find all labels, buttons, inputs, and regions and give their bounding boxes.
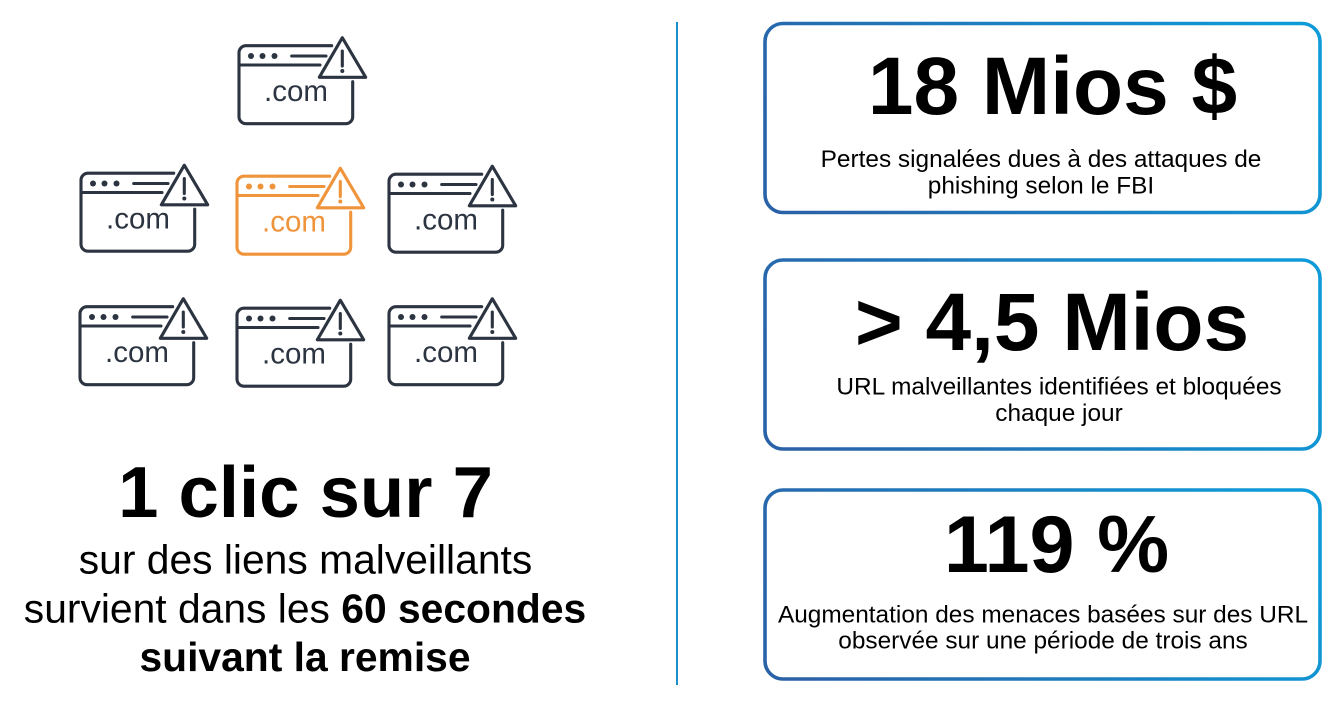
icon: row 2 left website warning (81, 165, 208, 251)
description: malicious URLs: URL malveillantes identifiées et bloquées (836, 374, 1282, 400)
description: phishing losses: phishing selon le FBI (928, 172, 1154, 200)
icon: row 2 centre orange website warning (237, 168, 364, 254)
description: malicious URLs: chaque jour (995, 400, 1123, 427)
icon: row 2 left website warning: .com (106, 202, 170, 236)
description: URL threat growth: observée sur une période de trois ans (838, 628, 1248, 654)
stat: 18 Mios $: 18 Mios $ (868, 41, 1237, 132)
panel: 119 % (765, 490, 1320, 679)
description: URL threat growth: Augmentation des menaces basées sur des URL (778, 602, 1308, 628)
icon: row 3 left website warning: .com (105, 336, 169, 369)
icon: row 3 right website warning (389, 299, 516, 385)
icon: row 3 right website warning: .com (414, 336, 478, 369)
panel: 4,5 Mios (765, 260, 1320, 449)
stat: > 4,5 Mios: > 4,5 Mios (855, 277, 1249, 368)
text block: click statistic explanation: suivant la remise (139, 634, 471, 680)
heading: 1 clic sur 7: 1 clic sur 7 (118, 452, 493, 533)
text block: click statistic explanation (24, 536, 586, 680)
description: URL threat growth (778, 602, 1308, 654)
text block: click statistic explanation: survient dans les 60 secondes (24, 586, 586, 632)
description: malicious URLs (836, 374, 1282, 427)
icon: top website warning (239, 38, 366, 124)
icon: row 2 centre orange website warning: .com (262, 206, 326, 238)
icon: row 2 right website warning: .com (414, 204, 478, 236)
panel: 18 Mios $ (765, 24, 1320, 212)
text block: click statistic explanation: sur des liens malveillants (79, 536, 532, 582)
description: phishing losses: Pertes signalées dues à des attaques de (821, 146, 1261, 173)
icon: row 3 centre website warning: .com (262, 338, 326, 370)
icon: top website warning: .com (264, 75, 328, 108)
stat: 119 %: 119 % (944, 500, 1169, 590)
icon: row 2 right website warning (389, 166, 516, 252)
vertical separator (676, 22, 678, 685)
icon: row 3 centre website warning (237, 300, 364, 386)
description: phishing losses (821, 146, 1261, 200)
icon: row 3 left website warning (80, 299, 207, 385)
